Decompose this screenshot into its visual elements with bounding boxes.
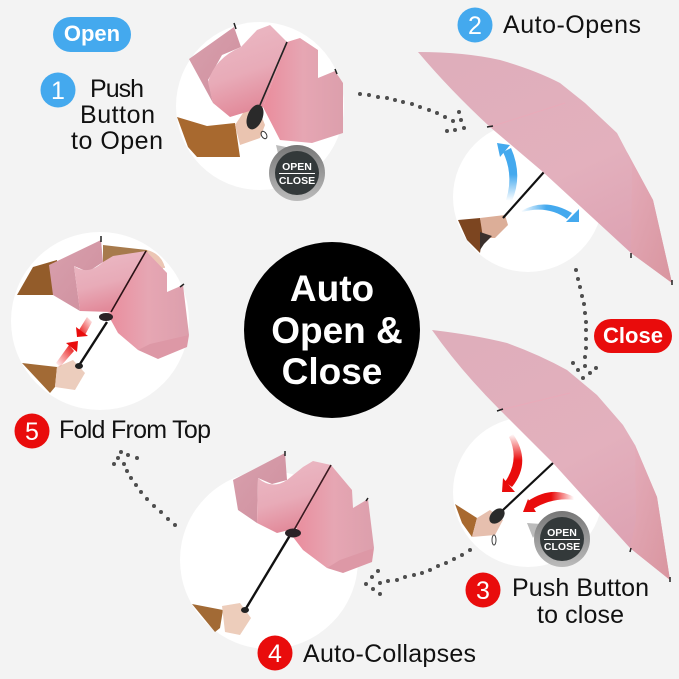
red arrows step 3 — [502, 434, 574, 512]
step 5 label — [14, 414, 211, 448]
dotted arrow step 4 to 5 — [112, 450, 177, 527]
step 4 label: Auto-Collapses — [303, 640, 476, 668]
step 1 label: to Open — [71, 127, 163, 155]
blue arrows step 2 — [497, 143, 579, 222]
step 4 label: 4 — [268, 640, 282, 668]
close badge — [594, 319, 672, 353]
step 4 label — [258, 636, 476, 670]
open close button step 1: CLOSE — [279, 175, 315, 187]
center title circle — [244, 242, 420, 418]
step 4 collapsed umbrella and hand — [192, 451, 374, 635]
step 1 label — [40, 72, 163, 155]
step 5 label: Fold From Top — [59, 416, 211, 444]
white circle step 3 — [453, 417, 603, 567]
open close button step 3 — [527, 511, 590, 567]
center title circle: Open & — [271, 310, 403, 351]
white circle step 5 — [11, 232, 189, 410]
step 2 label — [458, 8, 641, 42]
step 3 label: 3 — [476, 577, 490, 605]
dotted arrow step 3 to 4 — [364, 548, 472, 596]
step 3 label: Push Button — [512, 574, 649, 602]
dotted arrow step 2 to 3 — [571, 268, 598, 380]
close badge: Close — [603, 323, 663, 348]
step 1 label: Push — [90, 75, 144, 103]
red arrows step 5 — [56, 317, 92, 367]
step 5 umbrella and hands — [17, 236, 189, 393]
open close button step 1 — [269, 145, 325, 201]
dotted arrow step 1 to 2 — [358, 92, 466, 133]
open close button step 3: CLOSE — [544, 541, 580, 553]
open close button step 1: OPEN — [282, 161, 312, 173]
open close button step 3: OPEN — [547, 527, 577, 539]
step 3 label: to close — [537, 601, 624, 629]
step 2 label: Auto-Opens — [503, 11, 641, 39]
center title circle: Auto — [290, 268, 374, 309]
step 3 label — [466, 572, 649, 629]
step 3 open umbrella and hand — [432, 330, 670, 582]
white circle step 2 — [453, 122, 603, 272]
center title circle: Close — [282, 351, 382, 392]
step 1 label: 1 — [51, 77, 65, 105]
step 2 open umbrella and hand — [418, 52, 672, 285]
step 5 label: 5 — [25, 418, 39, 446]
step 1 label: Button — [80, 101, 155, 129]
step 1 collapsed umbrella and hand — [177, 23, 343, 157]
open badge: Open — [64, 21, 120, 46]
white circle step 4 — [180, 471, 358, 649]
step 2 label: 2 — [468, 12, 482, 40]
open badge — [53, 17, 131, 52]
white circle step 1 — [176, 22, 344, 190]
